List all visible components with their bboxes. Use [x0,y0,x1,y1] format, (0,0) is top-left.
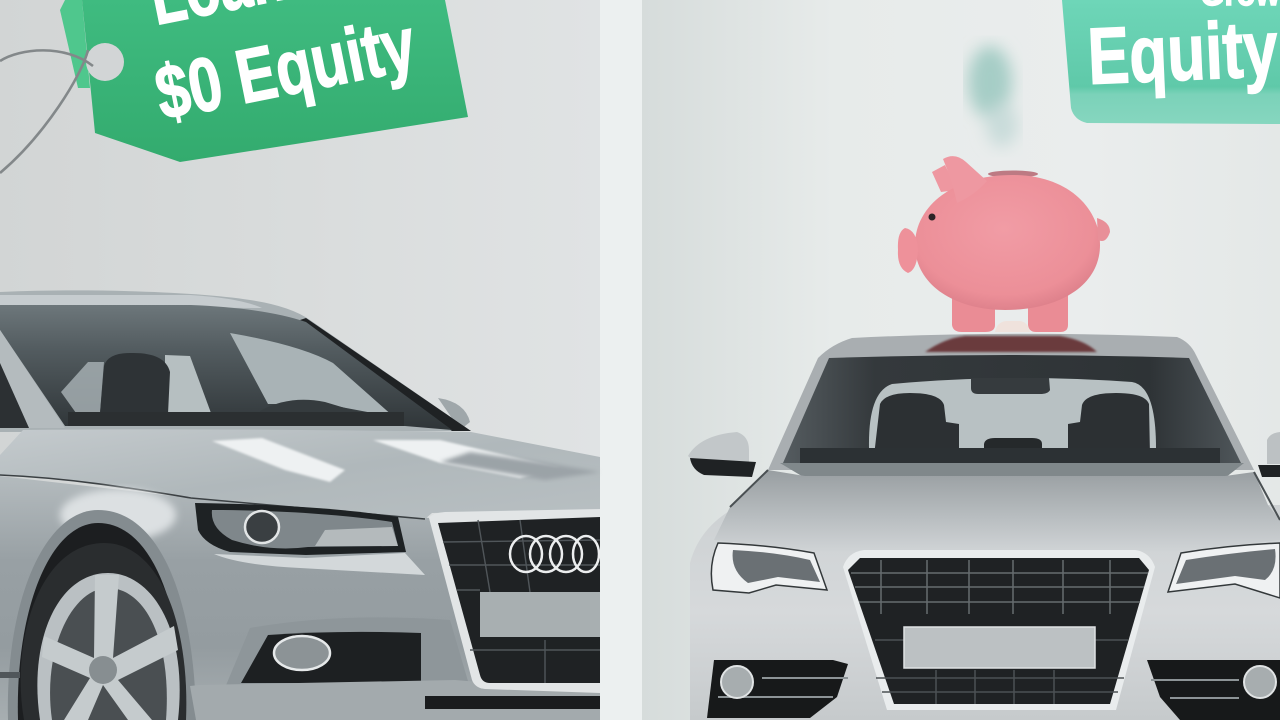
tag fold [60,0,90,88]
side mirror right [1258,432,1280,477]
licence plate [904,627,1095,668]
windscreen [0,305,452,430]
wheel hub [89,656,117,684]
fog vent left [707,660,848,718]
pig snout [898,228,918,273]
pig eye [928,214,936,220]
bumper lip [190,680,600,720]
body side [0,476,475,720]
centre console [984,438,1042,456]
side window [0,363,29,428]
lower vent [241,632,421,683]
windscreen [783,355,1241,463]
rim [37,573,180,720]
pig legs [952,293,1068,332]
headlight right [1168,543,1280,598]
grille surround [843,550,1155,710]
price tag: right [1062,0,1280,124]
lamp casing [711,543,827,593]
mirror [438,398,470,430]
tag eyelet [86,43,124,81]
pillar [0,330,65,428]
car: left [0,290,600,720]
pig tail [1097,218,1110,241]
pig shadow on roof [925,336,1097,352]
lamp glass [733,550,820,583]
hood [0,429,600,519]
body [690,505,1280,720]
rear view mirror [971,378,1050,394]
interior view [869,378,1156,448]
tyre [21,543,186,720]
lamp glass [1176,549,1276,584]
pig body [915,175,1100,310]
headlight left [711,543,827,593]
roof highlight [0,295,262,308]
fog lamp [274,636,330,670]
hood shadow panel [440,452,600,480]
headlight ring [245,511,279,543]
pig arch under [995,321,1030,332]
fog lamp [1244,666,1276,698]
headlight lower strip [315,527,398,546]
price tag: left [0,0,468,173]
headlight glass [212,510,398,548]
tag shape [1062,0,1280,124]
grille slats [851,560,1148,614]
icon: piggy bank [898,156,1110,332]
mirror base [1258,465,1280,477]
lip vent [425,696,600,709]
pillar dark line [300,318,471,431]
falling coin blur [968,46,1018,147]
coin slot [988,170,1038,178]
side pane [61,362,104,413]
roof [0,290,471,432]
cowl [780,463,1244,478]
tag shape [82,0,468,162]
bumper highlight [214,553,425,575]
bumper lower recess [224,617,470,690]
lamp casing [1168,543,1280,598]
fender highlight [60,489,176,541]
mirror base [690,458,756,477]
vent slats [1151,680,1239,698]
vent slats [718,678,848,697]
rear pane [165,355,211,413]
fog vent right [1147,660,1280,720]
grille [848,558,1149,704]
rim outer [37,573,180,720]
seat [100,353,170,414]
car: right [688,334,1280,720]
side mirror left [688,432,756,477]
left front seat [874,393,959,456]
hood highlights [212,438,560,482]
steering area [250,400,385,420]
grille [438,517,600,683]
pig far ear [932,165,957,192]
headlight [195,503,406,555]
pig ear [943,156,987,203]
grille surround [429,509,600,693]
tag string [0,50,93,173]
windscreen right pane [230,333,394,417]
lower grille bars [875,640,1128,704]
fog lamp [721,666,753,698]
sill [0,672,20,678]
grille slats [443,520,600,683]
cowl shadow line [730,470,1280,520]
fender line [0,475,425,519]
mirror shell [1267,432,1280,464]
hood [714,470,1280,552]
vent opening [707,660,848,718]
rim inner [50,588,167,720]
right front seat [1068,393,1150,456]
dash [68,412,404,426]
wheel arch band [8,510,196,720]
panel: left background [0,0,600,720]
panel: right background [642,0,1280,720]
wheel arch [18,523,186,720]
licence plate [480,592,600,637]
roof [768,334,1254,470]
rim spokes [42,575,178,720]
badge rings [510,536,599,572]
panel: centre divider [600,0,642,720]
dash band [800,448,1220,463]
mirror shell [688,432,749,462]
vent opening [1147,660,1280,720]
